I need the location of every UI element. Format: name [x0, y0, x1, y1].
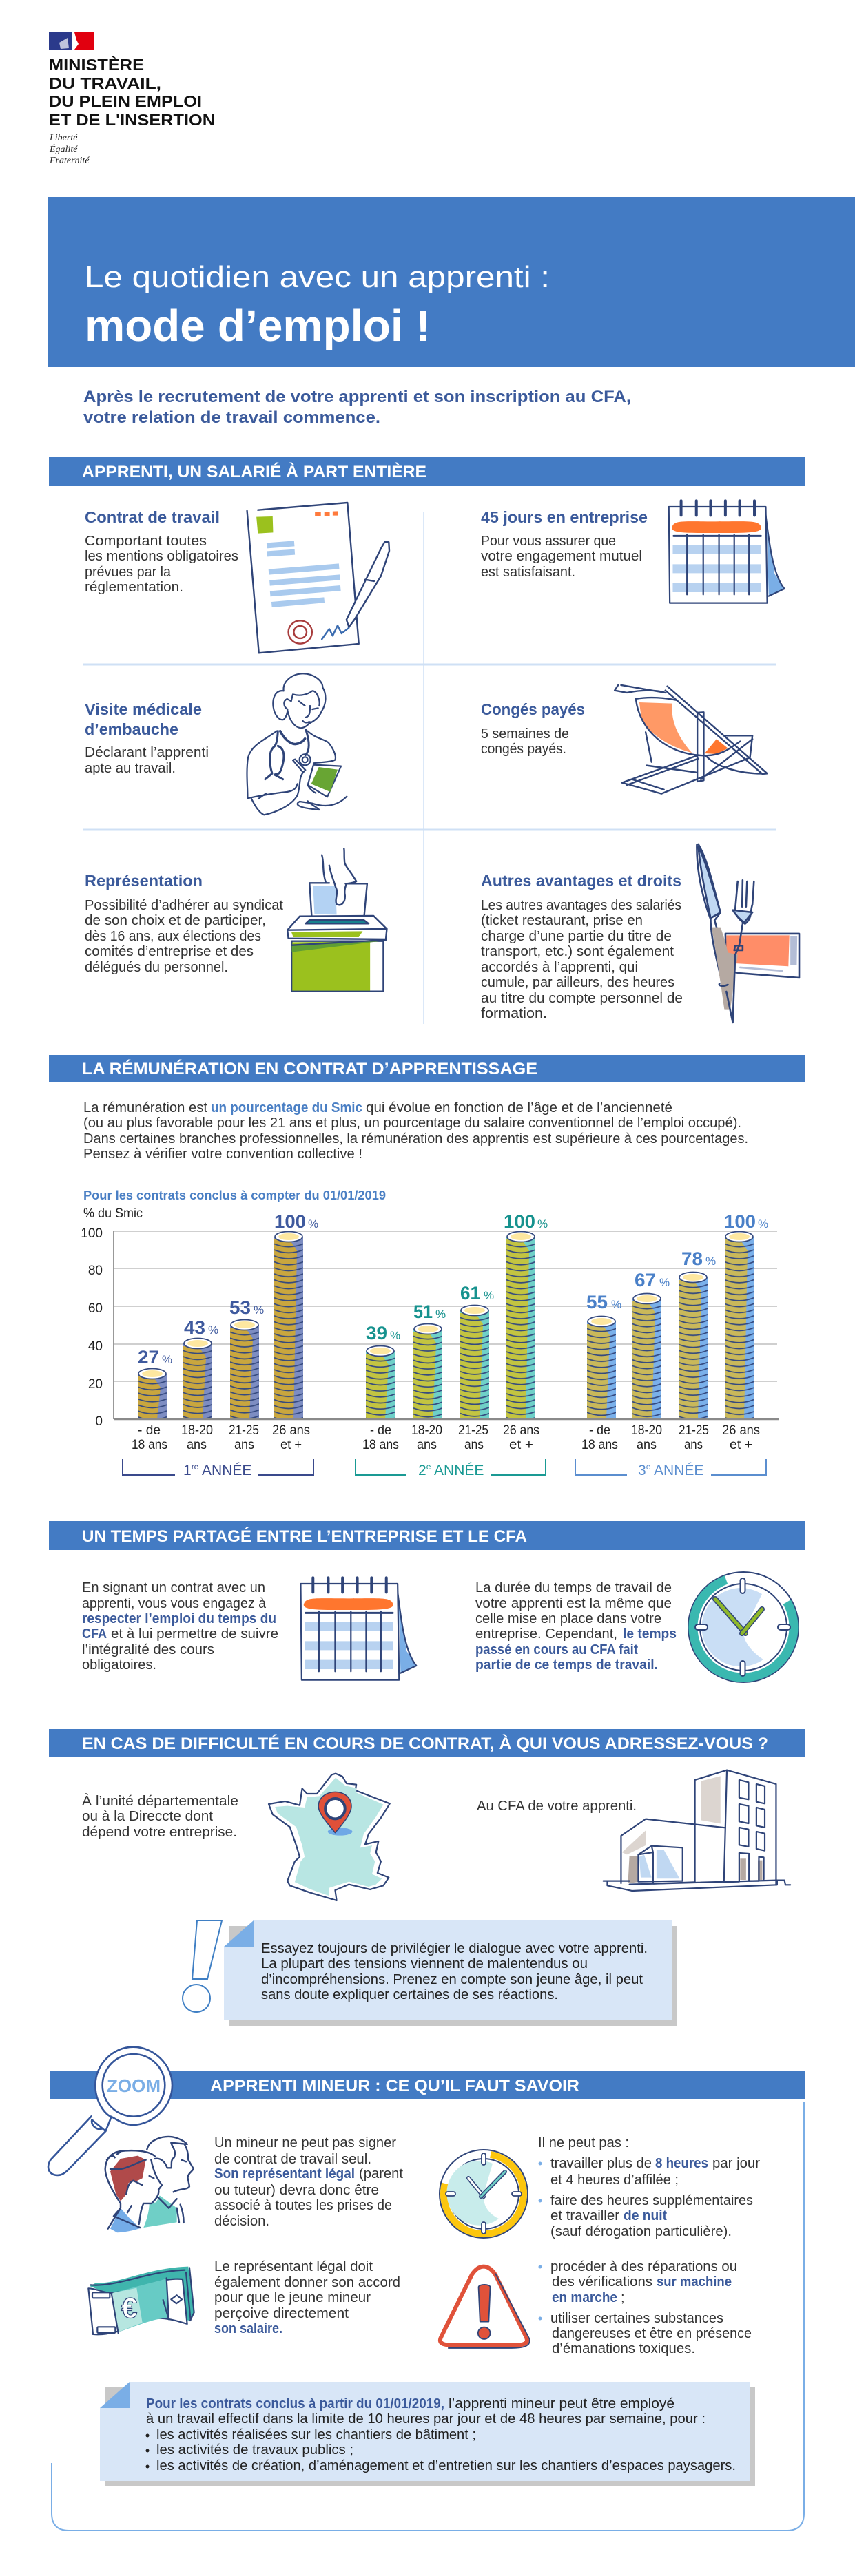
text block: machines et substances: d’émanations toxiques.	[552, 2341, 695, 2356]
ministry name: DU PLEIN EMPLOI	[49, 92, 202, 110]
section bar: temps partagé	[49, 1521, 805, 1550]
text block: réglementation.	[85, 580, 183, 595]
text block: il ne peut pas: travailler plus de	[550, 2156, 652, 2171]
icon: clock yellow	[440, 2150, 528, 2238]
x axis labels: 18 ans	[362, 1438, 399, 1452]
value labels: 1re année: %	[162, 1353, 172, 1366]
icon: two people profile	[105, 2137, 194, 2232]
title banner	[48, 197, 855, 367]
icon: clock teal	[688, 1572, 799, 1682]
text block: il ne peut pas: et 4 heures d’affilée ;	[550, 2172, 679, 2188]
intro text: Après le recrutement de votre apprenti et son inscription au CFA,	[83, 388, 631, 406]
x axis labels	[132, 1423, 760, 1452]
text block	[481, 726, 569, 757]
bracket: 2e année	[356, 1459, 546, 1478]
value labels: 3e année: %	[611, 1298, 621, 1311]
panel: autres avantages	[481, 844, 799, 1023]
bracket: 2e année: e	[426, 1462, 431, 1472]
text block: Pour vous assurer que	[481, 534, 616, 549]
text block: représentant légal: Son représentant légal	[214, 2166, 355, 2181]
text block: temps de travail: entreprise. Cependant,	[475, 1626, 617, 1642]
callout text: les activités de travaux publics ;	[156, 2442, 353, 2458]
text block: charge d’une partie du titre de	[481, 929, 672, 944]
callout text: les activités de création, d’aménagement et d’entretien sur les chantiers d’espaces paysagers.	[156, 2458, 736, 2473]
x axis labels: 18-20	[181, 1423, 213, 1438]
heading: Contrat de travail	[85, 508, 220, 526]
euro sign: €	[121, 2292, 137, 2324]
bracket: 2e année: 2	[418, 1463, 426, 1478]
heading	[85, 700, 202, 738]
grid dividers	[83, 512, 776, 1024]
callout text	[261, 1941, 648, 2002]
icon: calendar	[300, 1578, 416, 1680]
icon: warning triangle	[440, 2267, 530, 2348]
text block: machines et substances: dangereuses et être en présence	[552, 2326, 752, 2341]
bracket: 3e année: e	[646, 1462, 651, 1472]
text block: unité départementale: ou à la Direccte dont	[82, 1809, 213, 1824]
x axis labels: 18-20	[411, 1423, 442, 1438]
callout text: les activités réalisées sur les chantiers de bâtiment ;	[156, 2427, 476, 2442]
text block: au titre du compte personnel de	[481, 991, 683, 1006]
x axis labels: ans	[684, 1438, 703, 1452]
text block: rémunération: La rémunération est	[83, 1100, 207, 1116]
section bar: temps partagé: UN TEMPS PARTAGÉ ENTRE L’ENTREPRISE ET LE CFA	[82, 1527, 527, 1546]
callout text: Essayez toujours de privilégier le dialogue avec votre apprenti.	[261, 1941, 648, 1956]
text block: salaire: perçoive directement	[214, 2306, 349, 2321]
x axis labels: 21-25	[679, 1423, 709, 1438]
x axis labels: ans	[464, 1438, 484, 1452]
text block: il ne peut pas: de nuit	[624, 2208, 667, 2223]
text block: rémunération: Pensez à vérifier votre convention collective !	[83, 1146, 362, 1162]
text block: temps de travail: votre apprenti est la même que	[475, 1596, 672, 1611]
bracket: 1re année: re	[192, 1462, 199, 1472]
text block: représentant légal: (parent	[359, 2166, 403, 2181]
text block: représentant légal: décision.	[214, 2214, 269, 2229]
intro text	[83, 388, 631, 427]
text block: emploi du temps: respecter l’emploi du temps du	[82, 1611, 276, 1626]
value labels: 1re année	[138, 1211, 318, 1368]
y axis labels: 80	[88, 1264, 103, 1278]
heading: d’embauche	[85, 720, 178, 738]
x axis labels: et +	[730, 1438, 752, 1452]
x axis labels: 26 ans	[272, 1423, 310, 1438]
callout: dialogue	[183, 1920, 677, 2026]
motto: Liberté	[49, 133, 78, 143]
text block: dès 16 ans, aux élections des	[85, 929, 261, 944]
ministry name	[49, 55, 215, 129]
text block: représentant légal	[214, 2135, 403, 2229]
text block	[85, 898, 283, 975]
value labels: 2e année: %	[435, 1308, 446, 1321]
text block: apte au travail.	[85, 761, 176, 776]
text block: représentant légal: de contrat de travail seul.	[214, 2152, 371, 2167]
panel: contrat de travail	[85, 503, 389, 653]
axis title: % du Smic	[83, 1206, 143, 1221]
icon: euro banknotes	[88, 2267, 194, 2334]
bracket: 2e année: ANNÉE	[431, 1463, 484, 1478]
x axis labels: 18 ans	[581, 1438, 618, 1452]
ministry name: DU TRAVAIL,	[49, 74, 161, 92]
x axis labels: - de	[138, 1423, 161, 1438]
y axis labels: 60	[88, 1301, 103, 1316]
motto: Égalité	[49, 143, 78, 155]
text block: emploi du temps: et à lui permettre de suivre	[111, 1626, 278, 1642]
text block: 5 semaines de	[481, 726, 569, 742]
text block: temps de travail: La durée du temps de travail de	[475, 1580, 672, 1595]
bracket: 3e année: 3	[638, 1463, 646, 1478]
value labels: 3e année: 100	[724, 1211, 756, 1232]
text block: rémunération: Dans certaines branches professionnelles, la rémunération des apprentis est supérieure à ces pourcentages.	[83, 1131, 748, 1146]
text block: temps de travail	[475, 1580, 677, 1673]
heading: Représentation	[85, 872, 203, 890]
y axis labels: 40	[88, 1339, 103, 1354]
heading: Congés payés	[481, 700, 585, 718]
y axis labels: 100	[81, 1226, 103, 1241]
text block	[85, 745, 209, 776]
title line 2: mode d’emploi !	[85, 301, 431, 350]
value labels: 2e année: %	[484, 1289, 494, 1302]
x axis labels: 26 ans	[503, 1423, 539, 1438]
x axis labels: 21-25	[229, 1423, 259, 1438]
value labels: 1re année: 43	[184, 1317, 205, 1338]
bracket: 1re année: ANNÉE	[198, 1463, 251, 1478]
text block	[85, 534, 238, 595]
callout text: sans doute expliquer certaines de ses réactions.	[261, 1987, 558, 2002]
text block: les mentions obligatoires	[85, 549, 238, 564]
text block: il ne peut pas: et travailler	[550, 2208, 619, 2223]
callout text: d’incompréhensions. Prenez en compte son jeune âge, il peut	[261, 1972, 643, 1987]
value labels: 3e année: %	[705, 1255, 716, 1268]
text block: représentant légal: ou tuteur) devra donc être	[214, 2183, 379, 2198]
text block: comités d’entreprise et des	[85, 944, 254, 959]
value labels: 2e année: %	[390, 1329, 400, 1342]
section bar: apprenti salarié: APPRENTI, UN SALARIÉ À PART ENTIÈRE	[82, 462, 426, 481]
text block: délégués du personnel.	[85, 960, 228, 975]
text block: rémunération	[83, 1100, 748, 1162]
value labels: 1re année: %	[208, 1323, 218, 1337]
text block: Comportant toutes	[85, 534, 207, 549]
text block: emploi du temps: En signant un contrat avec un	[82, 1580, 265, 1595]
x axis labels: - de	[370, 1423, 391, 1438]
text block: il ne peut pas: faire des heures supplémentaires	[550, 2193, 753, 2208]
text block: salaire: son salaire.	[214, 2321, 282, 2336]
value labels: 3e année: %	[659, 1276, 670, 1289]
text block: prévues par la	[85, 565, 172, 580]
callout text: La plupart des tensions viennent de malentendus ou	[261, 1956, 588, 1971]
text block: salaire	[214, 2259, 400, 2336]
bracket: 3e année	[575, 1459, 766, 1478]
text block: machines et substances: sur machine	[657, 2274, 732, 2290]
y axis labels: 0	[95, 1414, 103, 1429]
text block: unité départementale: dépend votre entreprise.	[82, 1825, 237, 1840]
x axis labels: et +	[509, 1438, 533, 1452]
section bar: rémunération: LA RÉMUNÉRATION EN CONTRAT D’APPRENTISSAGE	[82, 1059, 537, 1078]
bracket: 1re année: 1	[183, 1463, 192, 1478]
text block: unité départementale: À l’unité départementale	[82, 1793, 238, 1809]
text block: emploi du temps: apprenti, vous vous engagez à	[82, 1596, 267, 1611]
section bar: rémunération	[49, 1055, 805, 1082]
value labels: 3e année	[586, 1211, 768, 1312]
text block: il ne peut pas: (sauf dérogation particulière).	[550, 2224, 732, 2239]
text block: salaire: pour que le jeune mineur	[214, 2290, 371, 2305]
heading: Autres avantages et droits	[481, 872, 681, 890]
x axis labels: - de	[589, 1423, 610, 1438]
text block	[481, 534, 642, 580]
icon: ballot box	[287, 848, 387, 992]
text block: de son choix et de participer,	[85, 913, 266, 928]
x axis labels: 18 ans	[132, 1438, 167, 1452]
panel: visite médicale	[85, 673, 347, 815]
icon: knife, fork and ticket	[697, 844, 799, 1023]
value labels: 2e année: %	[537, 1217, 548, 1231]
heading: Visite médicale	[85, 700, 202, 718]
title line 1: Le quotidien avec un apprenti :	[85, 260, 550, 294]
bars: 2e année	[366, 1231, 535, 1419]
text block: machines et substances: procéder à des réparations ou	[550, 2259, 737, 2274]
text block: temps de travail: passé en cours au CFA fait	[475, 1642, 638, 1657]
text block: formation.	[481, 1006, 547, 1021]
section bar: apprenti salarié	[49, 457, 805, 486]
value labels: 3e année: 67	[635, 1270, 656, 1290]
value labels: 1re année: 27	[138, 1347, 159, 1368]
text block: accordés à l’apprenti, qui	[481, 960, 638, 975]
callout text: Pour les contrats conclus à partir du 01/01/2019,	[146, 2396, 444, 2411]
bars: 3e année	[587, 1231, 754, 1419]
text block: il ne peut pas	[538, 2135, 760, 2239]
icon: french flag	[49, 32, 94, 50]
text block: représentant légal: associé à toutes les prises de	[214, 2198, 392, 2213]
value labels: 3e année: 78	[681, 1248, 703, 1269]
callout: contrats 2019	[100, 2382, 755, 2486]
callout text	[146, 2396, 736, 2473]
text block: temps de travail: le temps	[623, 1626, 677, 1642]
x axis labels: ans	[187, 1438, 207, 1452]
x axis labels: ans	[234, 1438, 254, 1452]
heading: 45 jours en entreprise	[481, 508, 648, 526]
value labels: 1re année: 53	[229, 1297, 251, 1318]
text block: Les autres avantages des salariés	[481, 898, 681, 913]
callout text: à un travail effectif dans la limite de 10 heures par jour et de 48 heures par semaine, pour :	[146, 2411, 705, 2427]
value labels: 1re année: %	[308, 1217, 318, 1231]
bracket: 3e année: ANNÉE	[650, 1463, 703, 1478]
text block: il ne peut pas: par jour	[712, 2156, 760, 2171]
icon: CFA building	[604, 1770, 790, 1891]
bar chart: % du Smic	[81, 1206, 779, 1478]
text block: machines et substances: ;	[621, 2290, 625, 2305]
text block: cumule, par ailleurs, des heures	[481, 975, 674, 990]
icon: exclamation mark	[183, 1920, 222, 2012]
section bar: apprenti mineur: APPRENTI MINEUR : CE QU’IL FAUT SAVOIR	[210, 2077, 579, 2095]
text block: emploi du temps	[82, 1580, 278, 1673]
motto	[49, 133, 90, 166]
ministry name: MINISTÈRE	[49, 55, 144, 74]
text block: votre engagement mutuel	[481, 549, 642, 564]
logo: ministère	[49, 32, 215, 166]
icon: magnifying glass zoom	[48, 2047, 172, 2175]
icon: calendar	[669, 501, 785, 603]
text block: machines et substances: utiliser certaines substances	[550, 2311, 723, 2326]
text block: emploi du temps: CFA	[82, 1626, 107, 1642]
text block: machines et substances: des vérifications	[552, 2274, 652, 2290]
section bar: difficulté	[49, 1729, 805, 1757]
y axis labels	[81, 1226, 103, 1429]
text block: temps de travail: partie de ce temps de travail.	[475, 1657, 658, 1673]
icon: deck chair	[615, 685, 768, 794]
panel: congés payés	[481, 685, 768, 794]
text block: transport, etc.) sont également	[481, 944, 674, 959]
value labels: 1re année: 100	[274, 1211, 306, 1232]
icon: contract and pen	[247, 503, 389, 653]
text block: emploi du temps: l’intégralité des cours	[82, 1642, 214, 1657]
intro text: votre relation de travail commence.	[83, 408, 380, 427]
text block: Déclarant l’apprenti	[85, 745, 209, 760]
text block: il ne peut pas: 8 heures	[655, 2156, 708, 2171]
value labels: 3e année: %	[758, 1217, 768, 1231]
text: CFA: Au CFA de votre apprenti.	[477, 1799, 637, 1814]
text block: est satisfaisant.	[481, 565, 575, 580]
text block: (ticket restaurant, prise en	[481, 913, 643, 928]
x axis labels: et +	[280, 1438, 302, 1452]
text block: il ne peut pas: Il ne peut pas :	[538, 2135, 629, 2150]
text block: salaire: Le représentant légal doit	[214, 2259, 373, 2274]
text block: rémunération: qui évolue en fonction de l’âge et de l’ancienneté	[366, 1100, 672, 1116]
text block: représentant légal: Un mineur ne peut pas signer	[214, 2135, 396, 2150]
value labels: 2e année: 51	[413, 1301, 433, 1322]
x axis labels: 26 ans	[722, 1423, 760, 1438]
x axis labels: 18-20	[631, 1423, 662, 1438]
text block: emploi du temps: obligatoires.	[82, 1657, 156, 1673]
icon: doctor	[247, 673, 347, 815]
frame: apprenti mineur	[52, 2102, 804, 2531]
section bar: apprenti mineur	[50, 2071, 805, 2099]
text block	[481, 898, 683, 1021]
y axis labels: 20	[88, 1377, 103, 1392]
panel: représentation	[85, 848, 387, 992]
callout text: l’apprenti mineur peut être employé	[449, 2396, 674, 2411]
text block: machines et substances	[539, 2259, 752, 2356]
x axis labels: 21-25	[458, 1423, 488, 1438]
value labels: 2e année: 39	[366, 1323, 387, 1343]
text block: Possibilité d’adhérer au syndicat	[85, 898, 283, 913]
text block: salaire: également donner son accord	[214, 2275, 400, 2290]
text block: machines et substances: en marche	[552, 2290, 617, 2305]
x axis labels: ans	[417, 1438, 437, 1452]
value labels: 2e année: 61	[460, 1283, 480, 1303]
value labels: 2e année: 100	[504, 1211, 535, 1232]
text block: congés payés.	[481, 742, 566, 757]
text block: rémunération: un pourcentage du Smic	[211, 1100, 362, 1116]
zoom label: ZOOM	[107, 2075, 161, 2096]
text block: temps de travail: celle mise en place dans votre	[475, 1611, 661, 1626]
value labels: 3e année: 55	[586, 1292, 608, 1312]
x axis labels: ans	[637, 1438, 657, 1452]
motto: Fraternité	[49, 156, 90, 166]
chart heading: Pour les contrats conclus à compter du 01/01/2019	[83, 1188, 386, 1202]
section bar: difficulté: EN CAS DE DIFFICULTÉ EN COURS DE CONTRAT, À QUI VOUS ADRESSEZ-VOUS ?	[82, 1734, 768, 1753]
text block: unité départementale	[82, 1793, 238, 1840]
value labels: 2e année	[366, 1211, 548, 1343]
panel: 45 jours en entreprise	[481, 501, 785, 603]
bars: 1re année	[138, 1231, 303, 1419]
text block: rémunération: (ou au plus favorable pour les 21 ans et plus, un pourcentage du salaire conventionnel de l’emploi occupé).	[83, 1116, 741, 1131]
ministry name: ET DE L'INSERTION	[49, 111, 215, 129]
icon: map of France with pin	[269, 1774, 390, 1900]
value labels: 1re année: %	[254, 1303, 264, 1317]
bracket: 1re année	[123, 1459, 313, 1478]
